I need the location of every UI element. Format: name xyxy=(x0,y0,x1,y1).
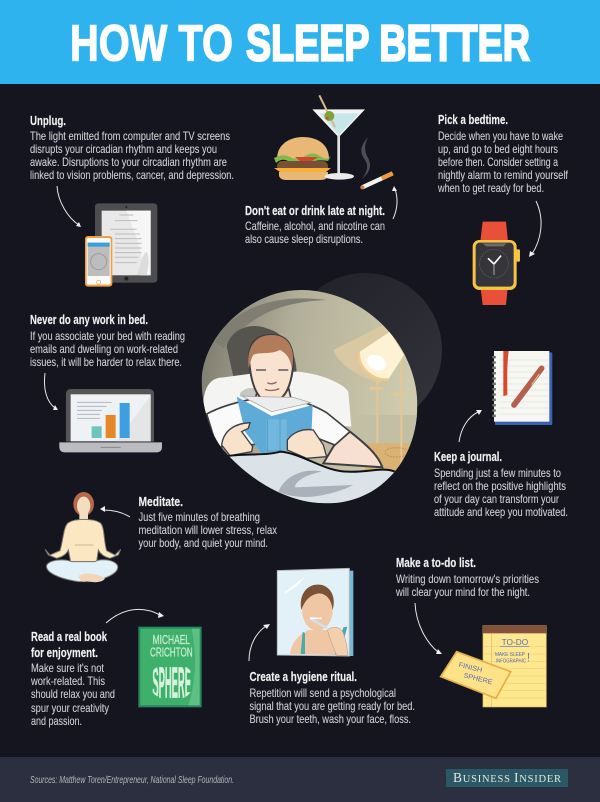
text: read a real book: and passion. xyxy=(31,714,82,728)
shirt xyxy=(207,398,350,447)
arrow: to-do xyxy=(415,603,442,654)
text: to-do list: Make a to-do list. xyxy=(396,556,476,570)
icon: notepad and sticky note: FINISH xyxy=(458,662,483,674)
icon: martini glass xyxy=(312,95,365,180)
sources: Sources: Matthew Toren/Entrepreneur, National Sleep Foundation. xyxy=(30,775,234,786)
text: unplug: Unplug. xyxy=(30,114,66,128)
icon: meditating figure xyxy=(45,492,121,582)
blanket xyxy=(228,452,395,507)
arrow: unplug xyxy=(57,186,81,227)
text: hygiene: signal that you are getting ready for bed. xyxy=(250,699,415,713)
pillow xyxy=(203,372,351,427)
text: meditate: your body, and quiet your mind. xyxy=(138,536,268,550)
text: never work in bed: emails and dwelling on work-related xyxy=(30,342,178,356)
text: don't eat xyxy=(245,204,385,246)
text: pick a bedtime: nightly alarm to remind yourself xyxy=(438,168,569,182)
text: pick a bedtime: Decide when you have to wake xyxy=(438,129,563,143)
icon: notepad and sticky note: SPHERE xyxy=(463,672,493,686)
text: keep a journal: of your day can transform your xyxy=(434,492,559,506)
text: hygiene: Create a hygiene ritual. xyxy=(250,670,357,684)
arrow: bedtime xyxy=(529,201,541,257)
text: hygiene: Brush your teeth, wash your face, floss. xyxy=(250,712,411,726)
icon: book sphere: CRICHTON xyxy=(150,645,193,660)
text: keep a journal: Keep a journal. xyxy=(434,450,502,464)
text: unplug: The light emitted from computer and TV screens xyxy=(30,129,230,143)
arrow: work xyxy=(44,373,58,410)
text: read a real book: work-related. This xyxy=(30,674,105,688)
text: unplug: disrupts your circadian rhythm and keeps you xyxy=(30,142,217,156)
text: never work in bed: Never do any work in bed. xyxy=(30,313,148,327)
icon: notepad and sticky note xyxy=(441,626,546,707)
infographic canvas: SPHERE xyxy=(152,659,191,707)
lamp xyxy=(359,332,404,379)
text: meditate: Meditate. xyxy=(138,495,183,509)
arrow: hygiene xyxy=(249,624,270,661)
text: read a real book: Make sure it's not xyxy=(31,661,105,675)
text: meditate: Just five minutes of breathing xyxy=(138,510,260,524)
text: keep a journal: reflect on the positive highlights xyxy=(434,479,566,493)
title: HOW TO xyxy=(70,14,233,72)
text: never work in bed: issues, it will be harder to relax there. xyxy=(30,355,182,369)
book xyxy=(242,396,311,412)
footer band xyxy=(0,757,600,802)
text: read a real book: Read a real book xyxy=(31,630,107,644)
text: don't eat: also cause sleep disruptions. xyxy=(245,232,363,246)
arrow: book xyxy=(106,609,164,623)
text: pick a bedtime: up, and go to bed eight hours xyxy=(438,142,558,156)
text: hygiene: Repetition will send a psychological xyxy=(250,686,396,700)
text: unplug: awake. Disruptions to your circadian rhythm are xyxy=(30,155,227,169)
icon: mirror with woman brushing teeth xyxy=(277,568,353,656)
icon: notepad and sticky note: ! xyxy=(527,651,530,665)
arrow: don't eat xyxy=(392,186,397,219)
text: to-do list xyxy=(395,556,539,599)
spotlight circle xyxy=(200,288,420,507)
text: keep a journal: Spending just a few minutes to xyxy=(434,466,561,480)
text: never work in bed xyxy=(30,313,185,369)
text: meditate: meditation will lower stress, relax xyxy=(138,523,277,537)
icon: burger, martini, cigarette xyxy=(274,95,393,189)
icon: notepad and sticky note: MAKE SLEEP xyxy=(495,652,525,658)
icon: notepad and sticky note: INFOGRAPHIC xyxy=(496,658,526,664)
text: read a real book: for enjoyment. xyxy=(31,646,98,660)
text: unplug: linked to vision problems, cancer, and depression. xyxy=(30,168,234,182)
arm xyxy=(323,432,382,467)
text: to-do list: will clear your mind for the night. xyxy=(395,585,530,599)
icon: book sphere: MICHAEL xyxy=(153,632,190,647)
icon: book sphere xyxy=(138,627,202,707)
text: read a real book: should relax you and xyxy=(31,687,115,701)
text: don't eat: Don't eat or drink late at night. xyxy=(245,204,385,218)
text: read a real book: spur your creativity xyxy=(31,701,109,715)
text: pick a bedtime: Pick a bedtime. xyxy=(438,113,508,127)
title xyxy=(70,14,530,72)
hands xyxy=(222,423,253,456)
icon: tablet and phone xyxy=(85,203,157,287)
illustration: reading in bed xyxy=(200,273,442,507)
icon: journal xyxy=(494,351,552,425)
text: keep a journal xyxy=(434,450,568,519)
icon: laptop xyxy=(59,389,162,452)
text: to-do list: Writing down tomorrow's priorities xyxy=(396,572,539,586)
neck and head xyxy=(255,388,292,397)
icon: notepad and sticky note: TO-DO xyxy=(502,638,528,647)
icon: burger xyxy=(274,137,331,180)
icon: watch xyxy=(473,222,520,305)
arrow: journal xyxy=(459,410,482,442)
text: don't eat: Caffeine, alcohol, and nicotine can xyxy=(245,219,385,233)
text: pick a bedtime: when to get ready for bed. xyxy=(437,181,544,195)
text: meditate xyxy=(138,495,277,550)
icon: cigarette xyxy=(360,137,393,189)
arrow: meditate xyxy=(100,506,130,517)
text: never work in bed: If you associate your bed with reading xyxy=(30,329,185,343)
header band xyxy=(0,0,600,84)
text: pick a bedtime xyxy=(437,113,569,195)
text: read a real book xyxy=(30,630,115,728)
text: unplug xyxy=(30,114,234,182)
text: pick a bedtime: before then. Consider setting a xyxy=(438,155,558,169)
logo: business insider: BUSINESS INSIDER xyxy=(453,770,561,785)
text: hygiene xyxy=(250,670,415,726)
lamp glow halo xyxy=(288,273,442,427)
